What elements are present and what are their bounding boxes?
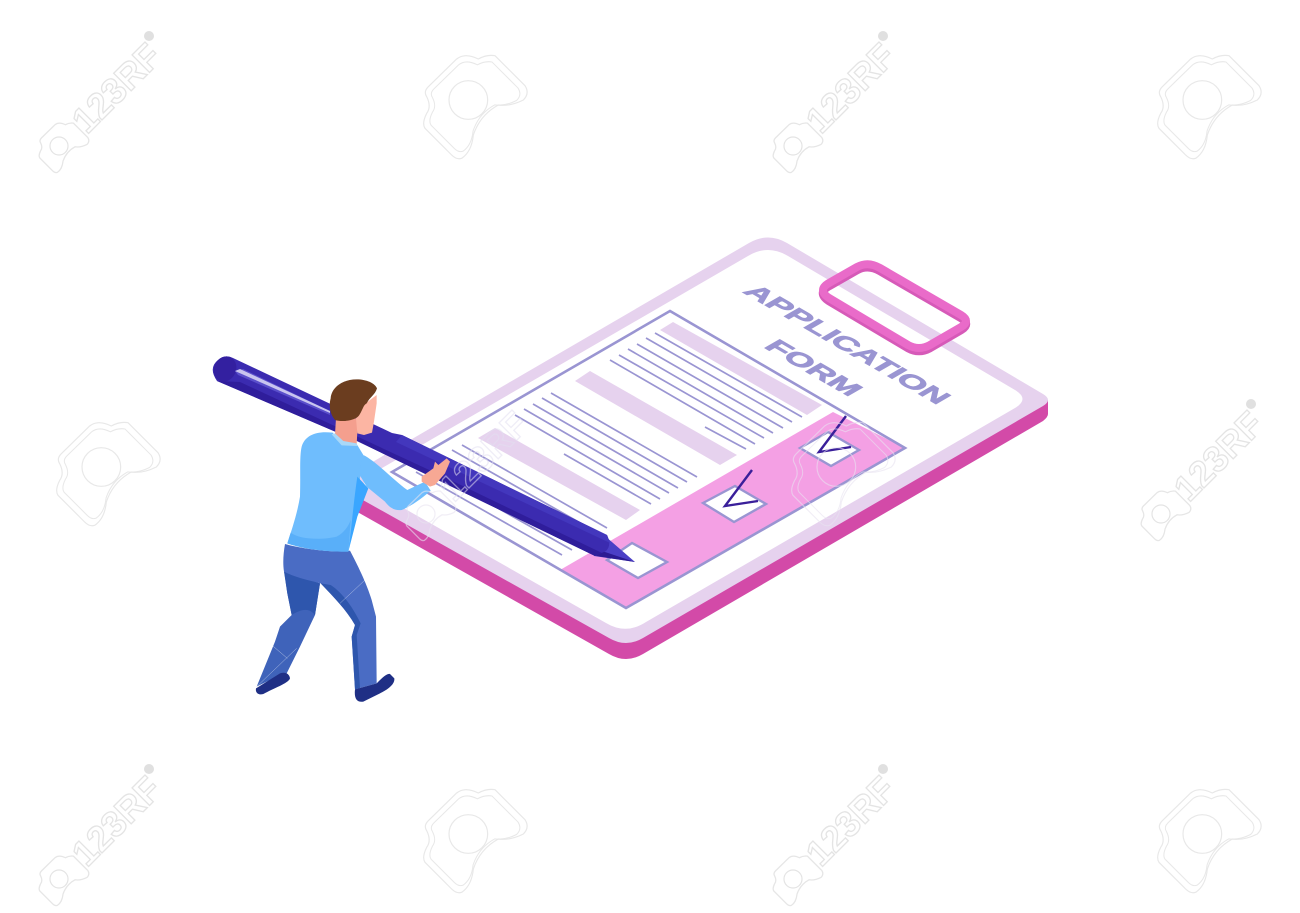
clip ring bbox=[823, 264, 966, 351]
right leg shade bbox=[321, 583, 361, 689]
watermark bottom middle: 123RF bbox=[798, 768, 903, 874]
giant pen bbox=[210, 353, 635, 562]
watermark egg left bbox=[57, 422, 160, 526]
man pushing pen bbox=[256, 379, 450, 702]
pen cap end bbox=[210, 353, 240, 385]
barrel light band bbox=[396, 435, 610, 543]
watermark egg center right bbox=[792, 422, 895, 526]
watermark egg top bbox=[424, 55, 527, 159]
arm bbox=[359, 455, 431, 510]
watermark egg bottom right bbox=[1158, 789, 1261, 893]
watermark right bbox=[1141, 399, 1271, 541]
face bbox=[356, 395, 377, 435]
pen highlight line bbox=[235, 369, 330, 413]
board rim bbox=[340, 238, 1048, 643]
collar bbox=[332, 433, 357, 446]
form title: FORM bbox=[758, 336, 869, 400]
watermark center overlay bbox=[406, 403, 536, 541]
checkbox 2 bbox=[703, 486, 766, 522]
checkmark 1 bbox=[819, 416, 851, 452]
board side bbox=[335, 400, 1048, 659]
hand bbox=[422, 458, 450, 487]
sweater hem shade bbox=[287, 520, 351, 552]
watermark bottom middle bbox=[773, 764, 903, 906]
pen tip bbox=[594, 536, 635, 562]
right leg and hips bbox=[283, 544, 377, 689]
watermark right: 123RF bbox=[1166, 403, 1271, 509]
pen tip shade bbox=[596, 551, 635, 562]
form sheet bbox=[392, 311, 905, 608]
right shoe bbox=[355, 674, 394, 702]
sweater side shade bbox=[348, 477, 368, 552]
watermark egg top right bbox=[1158, 55, 1261, 159]
left shoe bbox=[256, 673, 290, 694]
watermark top left: 123RF bbox=[64, 35, 169, 141]
watermark center overlay: 123RF bbox=[431, 403, 536, 509]
form title: APPLICATION bbox=[737, 281, 957, 408]
pen barrel bbox=[213, 356, 609, 556]
watermark top middle bbox=[773, 31, 903, 173]
form title bbox=[737, 281, 957, 408]
lilac bars bbox=[478, 322, 822, 520]
checkbox 1 bbox=[800, 432, 859, 466]
clipboard board bbox=[335, 238, 1048, 659]
sweater bbox=[287, 432, 363, 552]
board paper bbox=[364, 250, 1022, 629]
watermark top middle: 123RF bbox=[798, 35, 903, 141]
watermark bottom left bbox=[39, 764, 169, 906]
left leg bbox=[257, 570, 320, 687]
pink checkbox area bbox=[560, 412, 905, 608]
checkmark 2 bbox=[725, 470, 758, 506]
watermark egg bottom bbox=[424, 789, 527, 893]
pen highlight bbox=[235, 369, 330, 415]
barrel shadow bbox=[217, 381, 602, 556]
watermark top left bbox=[39, 31, 169, 173]
form outline bbox=[392, 311, 905, 608]
image streaks bbox=[257, 580, 365, 687]
text lines bbox=[416, 333, 802, 555]
left thigh shade bbox=[284, 572, 320, 615]
checkbox 3 bbox=[607, 543, 667, 578]
watermark bottom left: 123RF bbox=[64, 768, 169, 874]
hair bbox=[330, 379, 377, 421]
neck bbox=[335, 418, 361, 445]
